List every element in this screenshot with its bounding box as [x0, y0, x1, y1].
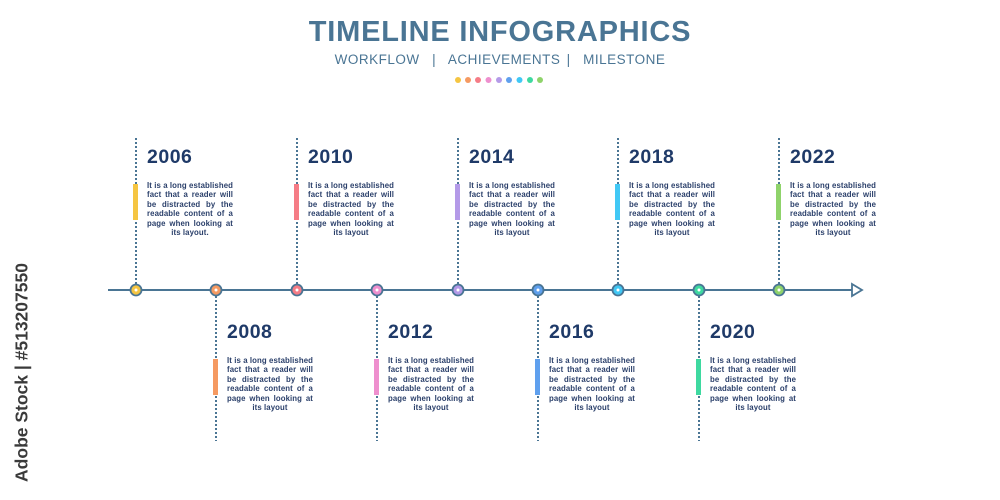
- item 2018: page when looking at: [629, 219, 715, 228]
- item 2022: It is a long established: [790, 181, 876, 190]
- item 2012: readable content of a: [388, 384, 474, 393]
- item 2022: its layout: [815, 228, 851, 237]
- item 2010: be distracted by the: [308, 200, 394, 209]
- item 2022: fact that a reader will: [790, 190, 876, 199]
- item 2010: fact that a reader will: [308, 190, 394, 199]
- item 2008: its layout: [252, 403, 288, 412]
- item 2022: readable content of a: [790, 209, 876, 218]
- item 2020: readable content of a: [710, 384, 796, 393]
- subtitle: WORKFLOW | ACHIEVEMENTS | MILESTONE: [335, 52, 665, 67]
- item 2010: page when looking at: [308, 219, 394, 228]
- item 2022: [790, 146, 876, 237]
- item 2014: page when looking at: [469, 219, 555, 228]
- item 2012: It is a long established: [388, 356, 474, 365]
- item 2020: be distracted by the: [710, 375, 796, 384]
- item 2016: its layout: [574, 403, 610, 412]
- item 2006: be distracted by the: [147, 200, 233, 209]
- item 2014: fact that a reader will: [469, 190, 555, 199]
- item 2022: 2022: [790, 146, 835, 168]
- item 2016: fact that a reader will: [549, 365, 635, 374]
- item 2006: its layout.: [171, 228, 209, 237]
- item 2012: 2012: [388, 321, 433, 343]
- item 2016: [549, 321, 635, 412]
- item 2016: 2016: [549, 321, 594, 343]
- item 2016: It is a long established: [549, 356, 635, 365]
- item 2014: [469, 146, 555, 237]
- item 2020: fact that a reader will: [710, 365, 796, 374]
- item 2012: its layout: [413, 403, 449, 412]
- item 2006: page when looking at: [147, 219, 233, 228]
- item 2016: page when looking at: [549, 394, 635, 403]
- color dots: [455, 77, 543, 83]
- item 2012: fact that a reader will: [388, 365, 474, 374]
- watermark text: Adobe Stock | #513207550: [12, 263, 32, 482]
- item 2008: be distracted by the: [227, 375, 313, 384]
- item 2010: its layout: [333, 228, 369, 237]
- item 2018: readable content of a: [629, 209, 715, 218]
- item 2014: be distracted by the: [469, 200, 555, 209]
- title: TIMELINE INFOGRAPHICS: [309, 16, 691, 48]
- item 2012: be distracted by the: [388, 375, 474, 384]
- item 2006: readable content of a: [147, 209, 233, 218]
- item 2006: It is a long established: [147, 181, 233, 190]
- item 2006: [147, 146, 233, 237]
- item 2018: [629, 146, 715, 237]
- item 2010: It is a long established: [308, 181, 394, 190]
- item 2010: readable content of a: [308, 209, 394, 218]
- item 2018: be distracted by the: [629, 200, 715, 209]
- item 2008: It is a long established: [227, 356, 313, 365]
- item 2022: be distracted by the: [790, 200, 876, 209]
- item 2018: 2018: [629, 146, 674, 168]
- item 2006: 2006: [147, 146, 192, 168]
- item 2018: It is a long established: [629, 181, 715, 190]
- item 2008: readable content of a: [227, 384, 313, 393]
- item 2010: [308, 146, 394, 237]
- item 2008: [227, 321, 313, 412]
- item 2022: page when looking at: [790, 219, 876, 228]
- item 2018: fact that a reader will: [629, 190, 715, 199]
- item 2008: 2008: [227, 321, 272, 343]
- item 2006: fact that a reader will: [147, 190, 233, 199]
- item 2020: 2020: [710, 321, 755, 343]
- item 2014: 2014: [469, 146, 514, 168]
- item 2014: its layout: [494, 228, 530, 237]
- item 2012: page when looking at: [388, 394, 474, 403]
- item 2020: its layout: [735, 403, 771, 412]
- item 2014: readable content of a: [469, 209, 555, 218]
- item 2018: its layout: [654, 228, 690, 237]
- item 2010: 2010: [308, 146, 353, 168]
- item 2014: It is a long established: [469, 181, 555, 190]
- item 2020: page when looking at: [710, 394, 796, 403]
- item 2020: [710, 321, 796, 412]
- item 2008: page when looking at: [227, 394, 313, 403]
- item 2016: be distracted by the: [549, 375, 635, 384]
- item 2008: fact that a reader will: [227, 365, 313, 374]
- item 2016: readable content of a: [549, 384, 635, 393]
- item 2012: [388, 321, 474, 412]
- item 2020: It is a long established: [710, 356, 796, 365]
